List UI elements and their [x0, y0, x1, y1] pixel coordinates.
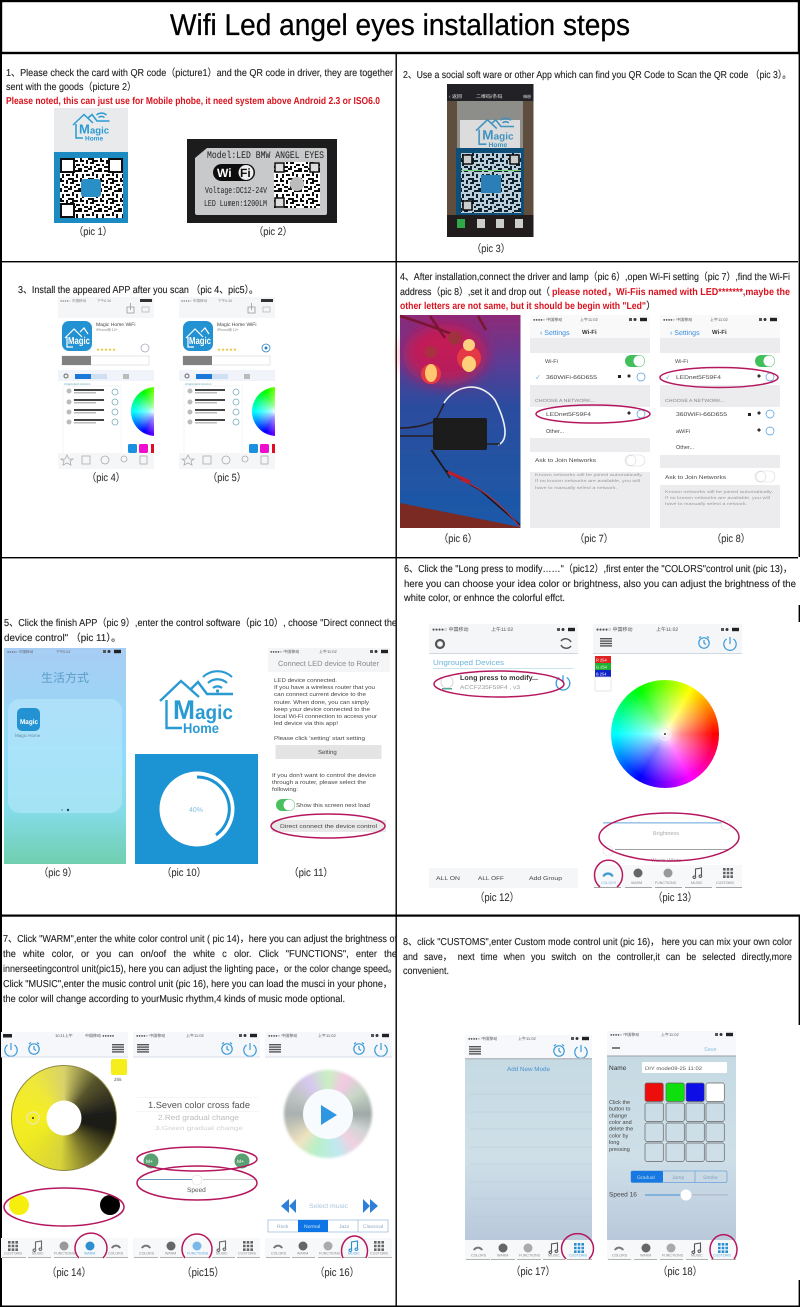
pic 15: functions screen: M+ [146, 1159, 153, 1165]
pic 5: app store screen installing: Magic [189, 336, 211, 347]
pic 1: QR card [54, 108, 128, 223]
pic 7: Wi-Fi settings screen: Other... [546, 429, 565, 435]
tab bar: CUSTOMS [569, 1254, 588, 1258]
pic 18: custom mode editor: delete the [609, 1126, 633, 1132]
pic 17: custom mode list: Add New Mode [507, 1066, 551, 1073]
step 1 text: sent with the goods（picture 2） [6, 81, 136, 93]
pic 11: connect to router screen: router. When done, you can simply [274, 700, 369, 706]
pic 10: Magic Home splash: 40% [189, 807, 203, 814]
pic 16: music screen: Classical [363, 1224, 383, 1230]
pic 4: app store screen [58, 297, 154, 469]
pic 9: home screen: ●●●●○ 中国移动 [7, 649, 34, 654]
step 6 text: here you can choose your idea color or brightness, also you can adjust the brightness of the [404, 579, 796, 590]
pic 8: Wi-Fi settings connected: 360WiFi-66D655 [676, 412, 727, 418]
tab bar: WARM [497, 1254, 508, 1258]
step 5 text: device control" （pic 11）。 [4, 632, 121, 644]
pic 7: Wi-Fi settings screen: Wi-Fi [545, 359, 558, 365]
pic 18: custom mode editor: color by [609, 1134, 629, 1140]
pic 2: driver label: LED Lumen:1200LM [204, 199, 267, 209]
tab bar: FUNCTIONS [319, 1252, 341, 1256]
pic 7: Wi-Fi settings screen: 上午11:02 [580, 317, 598, 322]
pic 15: functions screen: 3.Green gradual change [155, 1125, 244, 1132]
pic 1: QR card: M [79, 122, 90, 136]
pic 4: app store screen: Ungrouped Devices [64, 382, 91, 386]
title bar [1, 1, 799, 53]
pic 3: phone scanning QR: Home [488, 141, 507, 148]
pic 17: custom mode list [465, 1035, 594, 1260]
panel: step 5 [2, 558, 397, 914]
logo: Magic Home [160, 671, 233, 736]
panel: step 7 [1, 917, 397, 1305]
pic 13: colors control screen: B 254 [596, 672, 607, 676]
tab bar: COLORS [601, 881, 617, 885]
pic 18: custom mode editor: Speed 16 [609, 1192, 637, 1198]
pic 9: home screen: Magic [20, 718, 38, 726]
pic 17: custom mode list: 上午11:02 [518, 1036, 536, 1041]
pic 11: connect to router screen: Connect LED device to Router [278, 659, 379, 668]
tab bar: CUSTOMS [238, 1252, 257, 1256]
tab bar: COLORS [612, 1254, 628, 1258]
tab bar: MUSIC [32, 1252, 44, 1256]
tab bar: CUSTOMS [716, 881, 735, 885]
logo: Magic Home: agic [195, 702, 233, 724]
tab bar: MUSIC [216, 1252, 228, 1256]
pic 6: photo of driver and lamps [400, 315, 520, 528]
pic 16: music screen: 上午11:02 [318, 1033, 336, 1038]
caption pic 18: （pic 18） [658, 1265, 702, 1278]
pic 4: app store screen: Magic Home WiFi [96, 322, 135, 328]
pic 1: QR card: agic [90, 126, 109, 136]
pic 15: functions screen: M+ [237, 1159, 244, 1165]
pic 15: functions screen: Speed [187, 1187, 206, 1194]
pic 7: Wi-Fi settings screen: Ask to Join Networks [535, 458, 596, 464]
pic 18: custom mode editor: color and [609, 1120, 632, 1126]
pic 7: Wi-Fi settings screen: CHOOSE A NETWORK... [535, 398, 595, 403]
pic 18: custom mode editor: Gradual [637, 1175, 655, 1181]
pic 11: connect to router screen: LED device connected. [274, 678, 338, 684]
tab bar: MUSIC [691, 1254, 703, 1258]
pic 8: Wi-Fi settings connected: aWiFi [676, 429, 690, 435]
pic 13: colors control screen: G 254 [596, 664, 608, 670]
pic 8: Wi-Fi settings connected [660, 315, 780, 528]
pic 3: phone scanning QR: 相册 [523, 94, 531, 99]
pic 13: colors control screen: 上午11:02 [656, 626, 678, 633]
panel: step 8 [397, 917, 798, 1305]
tab bar [265, 1238, 392, 1258]
pic 18: custom mode editor: change [609, 1114, 627, 1120]
pic 16: music screen: Normal [304, 1224, 320, 1230]
pic 11: connect to router screen: through a router, please select the [272, 780, 366, 786]
pic 11: connect to router screen: following: [272, 787, 299, 793]
pic 18: custom mode editor: DIY mode09-25 11:02 [645, 1066, 702, 1072]
pic 12: device list screen: Ungrouped Devices [433, 658, 504, 667]
logo: Magic Home: Home [183, 720, 219, 736]
tab bar: WARM [297, 1252, 308, 1256]
pic 3: phone scanning QR: agic [494, 131, 514, 142]
caption pic 9: （pic 9） [39, 867, 77, 879]
pic 11: connect to router screen: local Wi-Fi connection to access your [274, 714, 377, 720]
pic 8: Wi-Fi settings connected: ✓ [666, 375, 670, 381]
pic 7: Wi-Fi settings screen: ●●●●○ 中国移动 [533, 317, 562, 322]
pic 16: music screen: ●●●●○ 中国移动 [268, 1033, 297, 1038]
pic 12: device list screen: ALL ON [436, 876, 460, 882]
pic 18: custom mode editor: Name [609, 1065, 627, 1072]
pic 7: Wi-Fi settings screen: If no known networks are available, you will [535, 478, 640, 483]
step 7 text: 7、Click "WARM",enter the white color control unit ( pic 14)，here you can adjust the brightness of [3, 934, 397, 945]
pic 7: Wi-Fi settings screen: Known networks will be joined automatically. [535, 472, 643, 477]
tab bar: CUSTOMS [4, 1252, 23, 1256]
step 4 text [400, 271, 790, 312]
pic 5: app store screen installing [179, 297, 275, 469]
pic 7: Wi-Fi settings screen: ✓ [536, 375, 540, 381]
pic 16: music screen: Select music [309, 1203, 349, 1210]
pic 11: connect to router screen: led device via this app! [274, 721, 339, 727]
pic 9: home screen: 下午6:24 [56, 649, 70, 654]
pic 11: connect to router screen: ●●●●○ 中国移动 [270, 649, 299, 654]
pic 8: Wi-Fi settings connected: ●●●●○ 中国移动 [663, 317, 692, 322]
tab bar: CUSTOMS [713, 1254, 732, 1258]
tab bar: COLORS [139, 1252, 155, 1256]
step 7 text: innerseetingcontrol unit(pic15), here you can adjust the lighting pace，or the color change speed。 [3, 964, 397, 975]
pic 12: device list screen [429, 624, 578, 888]
pic 4: app store screen: ★★★★★ [96, 347, 116, 352]
caption pic 17: （pic 17） [511, 1265, 555, 1278]
pic 18: custom mode editor: Save [704, 1047, 717, 1053]
step 8 text: convenient. [403, 966, 449, 977]
caption pic 4: （pic 4） [87, 472, 125, 484]
step 6 text: white color, or enhnce the colorful effct. [403, 593, 565, 604]
pic 5: app store screen installing: Ungrouped Devices [185, 382, 212, 386]
logo: Magic Home: M [173, 695, 195, 725]
step 5 text: 5、Click the finish APP（pic 9）,enter the control software（pic 10）, choose "Direct connect the [4, 617, 397, 629]
pic 11: connect to router screen: Direct connect the device control [280, 824, 377, 830]
step 4 text: ） [646, 300, 656, 312]
tab bar [1, 1238, 128, 1258]
tab bar: FUNCTIONS [54, 1252, 76, 1256]
highlight ellipse [434, 671, 564, 697]
pic 18: custom mode editor: long [609, 1140, 619, 1146]
step 7 text: the white color, or you can on/oof the white c olor. Click "FUNCTIONS", enter the [3, 949, 397, 960]
pic 9: home screen: 生活方式 [41, 671, 89, 685]
pic 18: custom mode editor: Jump [672, 1175, 684, 1181]
pic 12: device list screen: ALL OFF [478, 876, 505, 882]
caption pic 10: （pic 10） [162, 867, 206, 879]
pic 15: functions screen [133, 1032, 260, 1258]
pic 11: connect to router screen [268, 648, 390, 838]
pic 16: music screen [265, 1032, 392, 1258]
pic 8: Wi-Fi settings connected: If no known networks are available, you will [665, 495, 770, 500]
tab bar [607, 1240, 736, 1260]
pic 18: custom mode editor: Click the [609, 1100, 630, 1106]
step 7 text [3, 934, 397, 1005]
step 1 text [6, 67, 394, 107]
pic 15: functions screen: ●●●●○ 中国移动 [136, 1033, 165, 1038]
pic 11: connect to router screen: keep your device connected to the [274, 707, 370, 713]
pic 13: colors control screen: ●●●●○ 中国移动 [596, 626, 632, 633]
tab bar: COLORS [271, 1252, 287, 1256]
panel: step 1 [2, 54, 395, 261]
pic 15: functions screen: 上午11:02 [186, 1033, 204, 1038]
pic 2: driver label [187, 139, 337, 223]
pic 9: home screen [4, 648, 126, 864]
pic 11: connect to router screen: If you have a wireless router that you [274, 685, 375, 691]
pic 3: phone scanning QR [447, 84, 534, 237]
highlight circle [562, 1234, 594, 1259]
caption pic 11: （pic 11） [289, 867, 333, 879]
step 6 text [403, 563, 796, 604]
pic 7: Wi-Fi settings screen: 360WiFi-66D655 [546, 375, 597, 381]
highlight ellipses [594, 813, 739, 887]
highlight circle [341, 1236, 368, 1258]
pic 14: warm control screen: 10:11上午 [55, 1033, 73, 1038]
tab bar: COLORS [108, 1252, 124, 1256]
highlight ellipse [660, 368, 778, 388]
title bar: Wifi Led angel eyes installation steps [170, 9, 630, 42]
tab bar: FUNCTIONS [662, 1254, 684, 1258]
step 5 text [4, 617, 397, 644]
pic 3: phone scanning QR: M [482, 127, 494, 143]
pic 18: custom mode editor: button to [609, 1106, 630, 1112]
pic 10: Magic Home splash [135, 671, 258, 864]
tab bar: WARM [640, 1254, 651, 1258]
caption pic 1: （pic 1） [74, 226, 112, 238]
step 1 text: 1、Please check the card with QR code（picture1）and the QR code in driver, they are together [6, 67, 394, 79]
pic 7: Wi-Fi settings screen: have to manually select a network. [535, 485, 617, 490]
tab bar: FUNCTIONS [655, 881, 677, 885]
caption pic 13: （pic 13） [653, 891, 697, 904]
panel: step 4 [397, 262, 798, 557]
pic 7: Wi-Fi settings screen: Wi-Fi [582, 329, 597, 336]
caption pic 15: （pic15） [182, 1266, 224, 1279]
pic 12: device list screen: ACCF235F59F4 , v3 [460, 685, 520, 691]
tab bar: WARM [631, 881, 642, 885]
tab bar [133, 1238, 260, 1258]
pic 4: app store screen: Magic [68, 336, 90, 347]
pic 2: driver label: Wi [217, 166, 232, 180]
pic 11: connect to router screen: If you don't want to control the device [272, 773, 376, 779]
caption pic 5: （pic 5） [208, 472, 246, 484]
step 1 text: Please noted, this can just use for Mobile phobe, it need system above Android 2.3 or ISO6.0 [6, 96, 380, 107]
highlight circle [710, 1235, 737, 1259]
tab bar: FUNCTIONS [519, 1254, 541, 1258]
pic 3: phone scanning QR: ‹ 返回 [449, 93, 462, 100]
pic 13: colors control screen: R 254 [596, 658, 607, 662]
caption pic 14: （pic 14） [47, 1266, 91, 1279]
pic 8: Wi-Fi settings connected: Wi-Fi [712, 329, 727, 336]
pic 1: QR card: Home [85, 134, 103, 142]
pic 11: connect to router screen: 上午11:02 [319, 649, 337, 654]
pic 8: Wi-Fi settings connected: Wi-Fi [675, 359, 688, 365]
pic 11: connect to router screen: Show this screen next load [296, 803, 370, 809]
pic 12: device list screen: Add Group [529, 876, 562, 882]
tab bar: MUSIC [348, 1252, 360, 1256]
step 4 text: address（pic 8）,set it and drop out（ [400, 286, 550, 298]
pic 14: warm control screen: 中国移动 ●●●●● [85, 1033, 115, 1038]
pic 15: functions screen: 1.Seven color cross fade [148, 1100, 250, 1110]
tab bar: COLORS [471, 1254, 487, 1258]
pic 16: music screen: Jazz [339, 1224, 350, 1230]
pic 2: driver label: Voltage:DC12-24V [205, 186, 267, 196]
pic 5: app store screen installing: ●●●●○ 中国移动 [181, 298, 208, 303]
pic 2: driver label: Fi [240, 166, 251, 180]
tab bar: WARM [165, 1252, 176, 1256]
pic 3: phone scanning QR: 二维码/条码 [476, 93, 502, 100]
pic 18: custom mode editor: 上午11:02 [661, 1032, 679, 1037]
caption pic 16: （pic 16） [315, 1266, 359, 1279]
caption pic 6: （pic 6） [439, 533, 477, 545]
caption pic 7: （pic 7） [575, 533, 613, 545]
tab bar: CUSTOMS [370, 1252, 389, 1256]
tab bar [465, 1240, 592, 1260]
highlight ellipse [271, 814, 385, 838]
pic 11: connect to router screen: Please click 'setting' start setting [274, 736, 365, 742]
pic 9: home screen: Magic Home [15, 733, 41, 738]
tab bar [593, 865, 742, 888]
pic 4: app store screen: ●●●●○ 中国移动 [60, 298, 87, 303]
pic 7: Wi-Fi settings screen: LEDnet5F59F4 [546, 412, 591, 418]
highlight ellipses [137, 1147, 257, 1258]
pic 17: custom mode list: ●●●●○ 中国移动 [468, 1036, 497, 1041]
pic 15: functions screen: 2.Red gradual change [158, 1113, 239, 1122]
pic 16: music screen: Rock [277, 1224, 289, 1230]
tab bar: WARM [84, 1252, 95, 1256]
tab bar: MUSIC [691, 881, 703, 885]
step 7 text: the color will change according to yourMusic rhythm,4 kinds of music mode optional. [3, 994, 345, 1005]
pic 5: app store screen installing: 下午6:36 [218, 298, 232, 303]
pic 5: app store screen installing: Magic Home WiFi [217, 322, 256, 328]
pic 14: warm control screen [1, 1032, 128, 1258]
pic 18: custom mode editor [607, 1031, 737, 1260]
pic 8: Wi-Fi settings connected: ‹ Settings [670, 329, 700, 337]
pic 5: app store screen installing: ★★★★★ [217, 347, 237, 352]
pic 4: app store screen: 下午6:36 [97, 298, 111, 303]
tab bar: MUSIC [548, 1254, 560, 1258]
pic 8: Wi-Fi settings connected: LEDnet5F59F4 [676, 375, 721, 381]
pic 8: Wi-Fi settings connected: Ask to Join Networks [665, 475, 726, 481]
pic 7: Wi-Fi settings screen [530, 315, 650, 528]
pic 18: custom mode editor: ●●●●○ 中国移动 [610, 1032, 639, 1037]
panel: step 3 [2, 262, 395, 557]
caption pic 2: （pic 2） [254, 226, 292, 238]
step 8 text [403, 937, 793, 977]
pic 11: connect to router screen: can connect current device to the [274, 692, 366, 698]
pic 4: app store screen: iPhone版 12+ [96, 327, 118, 332]
pic 8: Wi-Fi settings connected: Known networks will be joined automatically. [665, 489, 773, 494]
pic 8: Wi-Fi settings connected: Other... [676, 445, 695, 451]
caption pic 3: （pic 3） [472, 243, 510, 255]
pic 8: Wi-Fi settings connected: have to manually select a network. [665, 501, 747, 506]
caption pic 12: （pic 12） [475, 891, 519, 904]
pic 14: warm control screen: 255 [114, 1077, 122, 1082]
pic 13: colors control screen: Brightness [653, 831, 679, 837]
highlight ellipses [4, 1188, 124, 1258]
panel: step 2 [397, 54, 798, 261]
pic 13: colors control screen [593, 624, 742, 888]
pic 18: custom mode editor: Strobe [703, 1175, 718, 1181]
panel: step 6 [397, 558, 798, 914]
pic 11: connect to router screen: Setting [318, 749, 337, 756]
pic 5: app store screen installing: iPhone版 12+ [217, 327, 239, 332]
pic 12: device list screen: Long press to modify... [460, 674, 538, 682]
tab bar: FUNCTIONS [187, 1252, 209, 1256]
pic 12: device list screen: ●●●●○ 中国移动 [432, 626, 468, 633]
step 4 text: other letters are not same, but it should be begin with "Led" [400, 301, 646, 312]
pic 7: Wi-Fi settings screen: ‹ Settings [540, 329, 570, 337]
caption pic 8: （pic 8） [712, 533, 750, 545]
pic 8: Wi-Fi settings connected: CHOOSE A NETWORK... [665, 398, 725, 403]
pic 8: Wi-Fi settings connected: 上午11:02 [710, 317, 728, 322]
step 3 text: 3、Install the appeared APP after you scan （pic 4、pic5）。 [18, 284, 258, 296]
pic 13: colors control screen: Warm White [651, 858, 681, 864]
step 7 text: Click "MUSIC",enter the music control unit (pic 16), here you can load the musci in your phone， [3, 979, 392, 990]
highlight ellipse [536, 405, 650, 423]
pic 12: device list screen: 上午11:02 [491, 626, 513, 633]
pic 18: custom mode editor: pressing [609, 1147, 630, 1153]
pic 2: driver label: Model:LED BMW ANGEL EYES [207, 150, 324, 162]
